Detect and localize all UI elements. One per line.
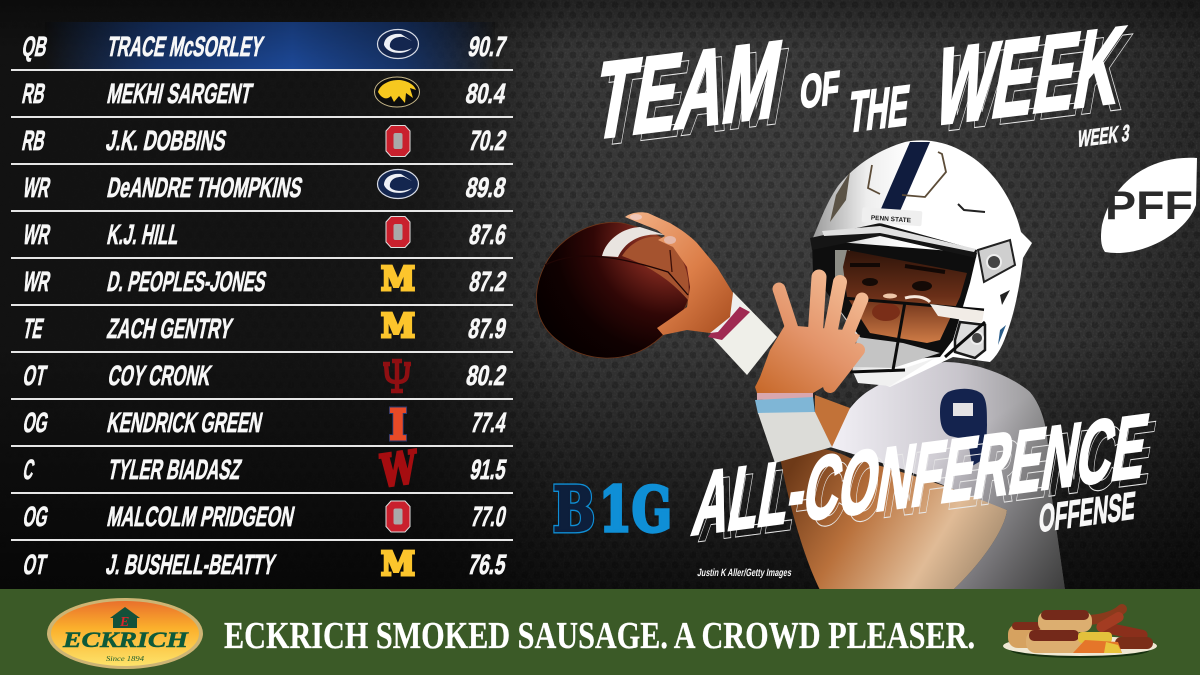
row: RB Dobbins [20, 124, 509, 156]
icon: Ohio State O [386, 216, 410, 248]
row: RB Sargent: MEKHI SARGENT [105, 77, 255, 109]
fingers [779, 277, 862, 386]
highlighted row background [45, 22, 495, 70]
row: RB Sargent [20, 77, 509, 109]
row: WR Hill [21, 218, 509, 250]
icon: Illinois I: I [390, 401, 406, 449]
row: WR Peoples-Jones: 87.2 [467, 265, 509, 297]
helmet [810, 140, 1032, 387]
title: Team of the Week: OF [798, 61, 841, 118]
row: OT Bushell-Beatty: 76.5 [466, 548, 509, 580]
helmet label [862, 207, 922, 226]
row: WR Hill: K.J. HILL [105, 218, 182, 250]
row: WR Thompkins: WR [21, 171, 53, 203]
row: C: TYLER BIADASZ [106, 453, 244, 485]
helmet stripe [880, 142, 930, 211]
palm [755, 325, 860, 393]
row: C [21, 453, 509, 485]
row: RB Dobbins: 70.2 [467, 124, 509, 156]
icon: Ohio State O [386, 126, 410, 156]
row: OT Bushell-Beatty: OT [21, 548, 49, 580]
row: WR Hill: WR [21, 218, 53, 250]
row: TE [21, 312, 509, 344]
subtitle: week 3: WEEK 3 [1076, 120, 1131, 152]
chin guard [853, 337, 940, 368]
title: Team of the Week: TEAM [593, 25, 797, 170]
row: C: 91.5 [468, 453, 509, 485]
row: OT Cronk [21, 359, 509, 391]
helmet left reflection [830, 172, 850, 222]
table of players [11, 22, 513, 583]
row: WR Peoples-Jones: WR [21, 265, 53, 297]
face [843, 250, 967, 343]
row: TE: TE [21, 312, 46, 344]
icon: Illinois I: I [390, 401, 406, 449]
row dividers [11, 69, 513, 541]
open hand [755, 277, 862, 414]
player photo [537, 140, 1065, 590]
side plates [978, 240, 1015, 282]
row: OG Green [21, 406, 510, 438]
row: WR Thompkins: 89.8 [463, 171, 509, 203]
logo: Big Ten: B [553, 473, 595, 546]
row: C: C [21, 453, 37, 485]
row: OG Pridgeon: MALCOLM PRIDGEON [105, 500, 297, 532]
icon: plate of sausages [1003, 609, 1157, 658]
icon: Michigan M: M [381, 259, 415, 298]
row: RB Dobbins: RB [20, 124, 48, 156]
icon: Michigan M: M [381, 306, 415, 345]
title: Team of the Week [586, 4, 1139, 170]
row: OT Cronk: OT [21, 359, 49, 391]
row: RB Dobbins: J.K. DOBBINS [104, 124, 229, 156]
icon: Wisconsin W: W [379, 442, 418, 498]
logo: Big Ten: B [553, 473, 595, 546]
upper arm [780, 448, 1007, 590]
house icon: E [119, 615, 129, 630]
row: OG Green: OG [21, 406, 51, 438]
house icon [110, 607, 140, 630]
face opening [812, 240, 977, 360]
row: TE: ZACH GENTRY [105, 312, 236, 344]
logo: PFF [1101, 158, 1197, 253]
row: WR Thompkins [21, 171, 509, 203]
throwing hand [625, 212, 777, 375]
row: OG Pridgeon: 77.0 [469, 500, 509, 532]
wrist tape [758, 412, 832, 463]
logo: Eckrich: Since 1894 [106, 654, 144, 663]
row: OT Bushell-Beatty [21, 548, 509, 580]
icon: Iowa hawk [374, 77, 420, 107]
logo: PFF: PFF [1105, 184, 1193, 228]
logo: Eckrich: ECKRICH [62, 627, 189, 652]
sponsor banner [0, 589, 1200, 675]
row: QB: 90.7 [466, 30, 509, 62]
row: QB: TRACE McSORLEY [105, 30, 267, 62]
row: QB [20, 30, 509, 62]
row: WR Peoples-Jones [21, 265, 509, 297]
row: WR Thompkins: DeANDRE THOMPKINS [105, 171, 305, 203]
row: OT Cronk: COY CRONK [106, 359, 215, 391]
icon: Indiana trident [383, 360, 411, 392]
brow band [810, 223, 977, 258]
helmet panel lines [868, 152, 946, 197]
row: RB Sargent: 80.4 [463, 77, 509, 109]
row: OT Bushell-Beatty: J. BUSHELL-BEATTY [104, 548, 279, 580]
title: Team of the Week: THE [845, 74, 913, 145]
row: RB Sargent: RB [20, 77, 48, 109]
row: OT Cronk: 80.2 [464, 359, 509, 391]
logo: Big Ten [553, 473, 672, 546]
title: Team of the Week: TEAM [586, 18, 790, 163]
jersey number 9 [940, 389, 987, 466]
row: WR Hill: 87.6 [467, 218, 509, 250]
forearm skin [815, 395, 850, 447]
slogan: ECKRICH SMOKED SAUSAGE. A CROWD PLEASER. [224, 615, 975, 657]
facemask [843, 298, 985, 372]
row: QB: QB [20, 30, 50, 62]
icon: Michigan M: M [381, 544, 415, 583]
logo: Eckrich [47, 598, 203, 669]
helmet label: PENN STATE [871, 215, 912, 225]
row: TE: 87.9 [466, 312, 509, 344]
photo credit: Justin K Aller/Getty Images [696, 567, 793, 579]
row: OG Green: KENDRICK GREEN [105, 406, 265, 438]
row: WR Peoples-Jones: D. PEOPLES-JONES [105, 265, 269, 297]
jersey [830, 362, 1065, 590]
row: OG Green: 77.4 [469, 406, 510, 438]
icon: Penn State lion [378, 30, 418, 58]
row: OG Pridgeon: OG [21, 500, 51, 532]
football [537, 222, 691, 358]
logo: Big Ten: 1G [599, 473, 672, 546]
icon: Ohio State O [386, 501, 410, 532]
row: OG Pridgeon [21, 500, 509, 532]
icon: Penn State lion [378, 170, 418, 198]
